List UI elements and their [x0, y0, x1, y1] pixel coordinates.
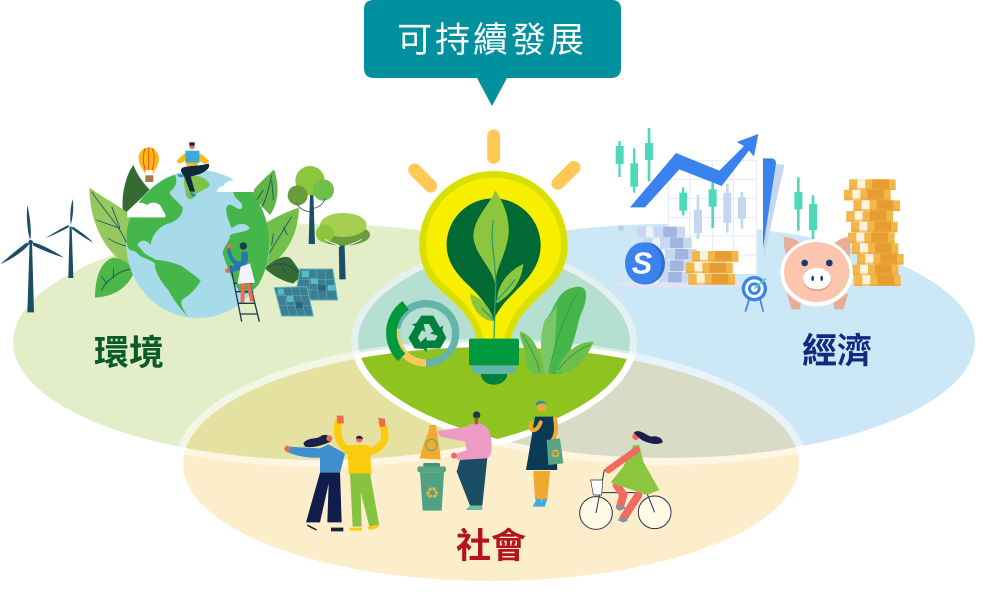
overlap: environment and economy	[351, 262, 637, 356]
icon: tree	[288, 166, 334, 244]
overlaps with society	[184, 359, 798, 467]
environment illustration	[1, 142, 370, 322]
icon: woman with tote: ♻	[550, 447, 560, 461]
title callout	[364, 0, 621, 106]
icon: gold coins small stack	[686, 251, 738, 285]
icon: globe	[126, 170, 270, 318]
icon: recycling bin: ♻	[425, 483, 439, 502]
icon: cyclist	[580, 431, 671, 529]
icon: solar panels	[274, 269, 338, 316]
icon: piggy bank	[780, 237, 853, 309]
icon: umbrella tree	[316, 213, 370, 279]
icon: bulb	[419, 171, 568, 385]
icon: clouds	[127, 173, 254, 217]
icon: person on ladder	[225, 242, 259, 322]
triple overlap centre	[353, 342, 635, 446]
icon: folder	[763, 158, 784, 260]
icon: woman waving	[284, 435, 345, 531]
icon: candlesticks	[616, 128, 817, 240]
icon: recycling symbol	[403, 316, 449, 357]
economy illustration	[613, 128, 904, 312]
icon: recycling ring	[391, 304, 456, 363]
label: economy: 經濟	[802, 332, 872, 371]
society circle	[183, 347, 799, 581]
icon: recycling bag	[420, 425, 441, 460]
icon: plant	[520, 287, 594, 374]
economy circle	[358, 224, 975, 458]
icon: dollar coin	[625, 242, 665, 284]
label: society: 社會	[456, 527, 526, 566]
title: 可持續發展	[397, 21, 587, 60]
label: environment: 環境	[94, 334, 164, 373]
icon: man cheering	[337, 416, 385, 531]
icon: man with bag	[437, 411, 492, 510]
icon: woman with tote	[526, 401, 563, 507]
icon: person reading	[177, 142, 209, 197]
icon: silver coin stack	[613, 225, 747, 288]
icon: wind turbines	[1, 199, 93, 312]
icon: target	[742, 276, 767, 312]
icon: gold coin tower	[844, 179, 904, 286]
society illustration	[284, 401, 671, 531]
arrow: rising trend	[630, 134, 758, 207]
icon: dollar coin: S	[632, 247, 653, 281]
light bulb illustration	[391, 136, 594, 385]
environment circle	[13, 224, 630, 460]
society circle halo	[175, 339, 807, 589]
icon: leaves behind globe	[89, 165, 303, 298]
icon: hot air balloon	[139, 147, 159, 182]
icon: recycling bin	[417, 463, 446, 511]
icon: light rays	[415, 136, 574, 186]
icon: chart sheet	[668, 161, 757, 274]
